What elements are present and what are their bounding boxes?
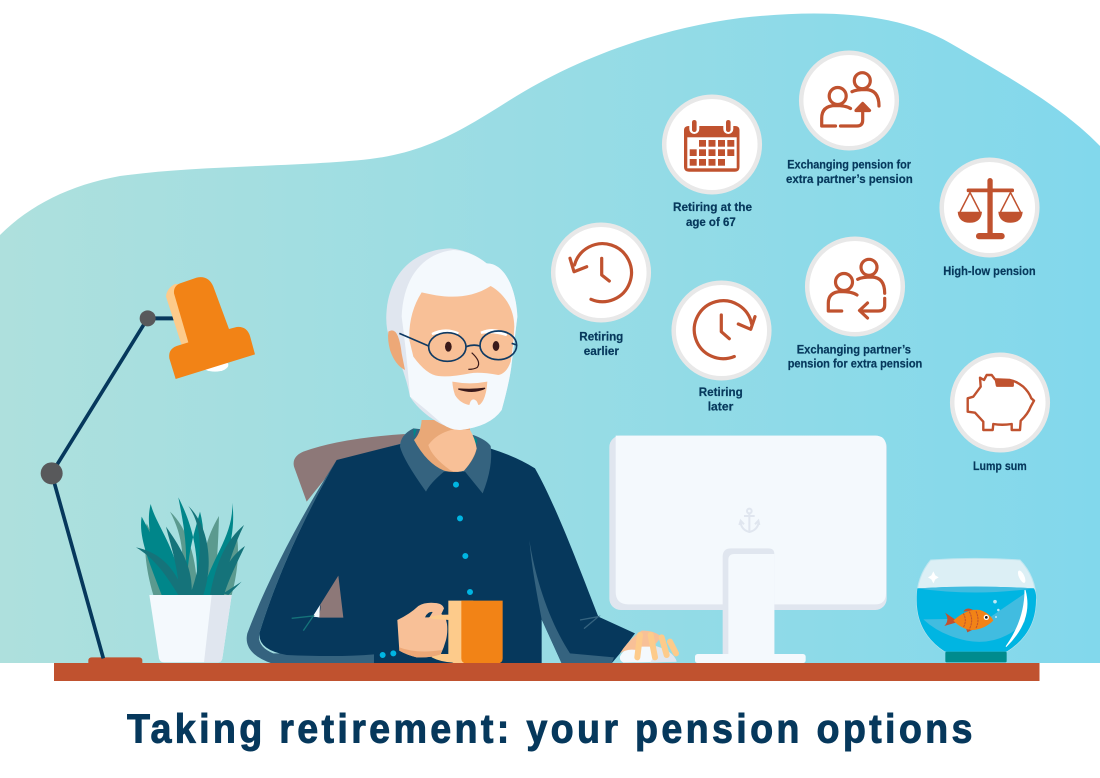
label: exchanging partner's pension for extra pension: pension for extra pension — [788, 357, 922, 371]
label: exchanging pension for extra partner's pension: Exchanging pension for — [787, 157, 911, 171]
label: exchanging partner's pension for extra pension: Exchanging partner’s — [797, 342, 911, 356]
option: exchanging partner's pension for extra pension — [788, 239, 922, 371]
label: retiring earlier: earlier — [584, 344, 619, 358]
plant — [136, 497, 245, 662]
desk — [54, 663, 1040, 681]
icon: partners with up arrow — [822, 73, 879, 126]
icon: clock turning forward — [694, 301, 755, 359]
label: lump sum: Lump sum — [973, 459, 1027, 473]
option: retiring later — [674, 283, 769, 414]
icon: goldfish — [944, 609, 993, 632]
label: exchanging pension for extra partner's pension: extra partner’s pension — [786, 172, 913, 186]
option: retiring at the age of 67 — [664, 97, 760, 229]
label: high-low pension: High-low pension — [943, 264, 1036, 278]
option: retiring earlier — [553, 225, 649, 358]
option: high-low pension — [942, 160, 1037, 278]
label: retiring at the age of 67: age of 67 — [686, 215, 736, 229]
icon: scales — [958, 178, 1023, 239]
monitor — [609, 436, 887, 663]
label: retiring at the age of 67 — [673, 200, 752, 229]
mouse and right hand — [620, 631, 677, 663]
man: head — [386, 248, 517, 430]
label: retiring later — [699, 385, 743, 414]
option: lump sum — [952, 355, 1048, 473]
lamp — [41, 277, 255, 663]
option: exchanging pension for extra partner's pension — [786, 53, 913, 186]
icon: clock turning back — [570, 244, 631, 302]
icon: anchor logo — [739, 509, 759, 533]
icon: partners with return arrow — [828, 259, 885, 318]
fish bowl — [917, 558, 1036, 662]
mug and holding hand — [397, 601, 503, 663]
title: Taking retirement: your pension options — [127, 706, 972, 752]
label: retiring later: Retiring — [699, 385, 743, 399]
label: exchanging partner's pension for extra pension — [788, 342, 922, 371]
icon: piggy bank — [968, 375, 1034, 430]
label: retiring later: later — [708, 400, 734, 414]
man: chair and body — [247, 420, 635, 663]
label: retiring at the age of 67: Retiring at the — [673, 200, 752, 214]
label: retiring earlier: Retiring — [579, 330, 623, 344]
icon: calendar — [684, 118, 740, 172]
label: retiring earlier — [579, 330, 623, 358]
label: exchanging pension for extra partner's pension — [786, 157, 913, 186]
